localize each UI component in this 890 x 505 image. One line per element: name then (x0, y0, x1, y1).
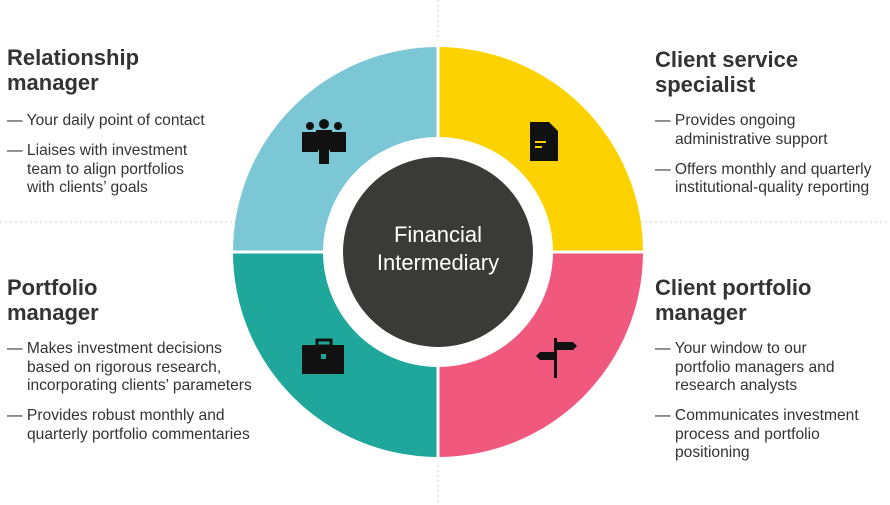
text: client service (655, 112, 872, 196)
quadrant: relationship (233, 47, 438, 252)
text: client service: — Provides ongoing (655, 112, 795, 129)
icon: signpost (536, 338, 577, 378)
icon: people (302, 119, 346, 164)
center circle (343, 157, 533, 347)
text: client portfolio: — Your window to our (655, 340, 807, 357)
text: client portfolio: process and portfolio (675, 426, 820, 442)
heading: client portfolio manager: manager (655, 300, 747, 324)
text: client portfolio: portfolio managers and (675, 358, 835, 376)
heading: portfolio manager: Portfolio (7, 275, 97, 300)
text: client portfolio: positioning (675, 444, 750, 461)
heading: client service specialist: Client service (655, 47, 798, 72)
text: portfolio: — Makes investment decisions (7, 340, 222, 357)
text: portfolio (7, 340, 252, 442)
text: relationship: — Liaises with investment (7, 142, 187, 159)
heading: client service specialist (655, 47, 798, 96)
icon: briefcase (302, 340, 344, 374)
heading: client portfolio manager (655, 275, 811, 324)
icon: document (530, 122, 558, 161)
text: relationship: — Your daily point of contact (7, 112, 205, 129)
text: portfolio: incorporating clients’ parameters (27, 377, 252, 394)
text: portfolio: quarterly portfolio commentaries (27, 426, 250, 442)
quadrant: portfolio (233, 252, 438, 457)
quadrant: client service (438, 47, 643, 252)
text: client portfolio: research analysts (675, 377, 797, 394)
heading: client service specialist: specialist (655, 72, 755, 96)
text: client service: institutional-quality reporting (675, 179, 869, 196)
heading: relationship manager (7, 45, 139, 94)
text: client portfolio: — Communicates investment (655, 407, 859, 424)
quadrant: client portfolio (438, 252, 643, 457)
heading: portfolio manager: manager (7, 300, 99, 324)
center circle: Intermediary (377, 250, 499, 275)
text: client service: — Offers monthly and quarterly (655, 160, 871, 178)
heading: portfolio manager (7, 275, 99, 324)
center circle: Financial (394, 222, 482, 247)
text: relationship: with clients’ goals (27, 179, 148, 196)
text: client service: administrative support (675, 130, 828, 148)
heading: relationship manager: manager (7, 70, 99, 94)
text: relationship: team to align portfolios (27, 160, 184, 178)
heading: relationship manager: Relationship (7, 45, 139, 70)
heading: client portfolio manager: Client portfolio (655, 275, 811, 300)
text: client portfolio (655, 340, 859, 461)
text: relationship (7, 112, 205, 196)
text: portfolio: — Provides robust monthly and (7, 407, 225, 424)
text: portfolio: based on rigorous research, (27, 358, 221, 376)
